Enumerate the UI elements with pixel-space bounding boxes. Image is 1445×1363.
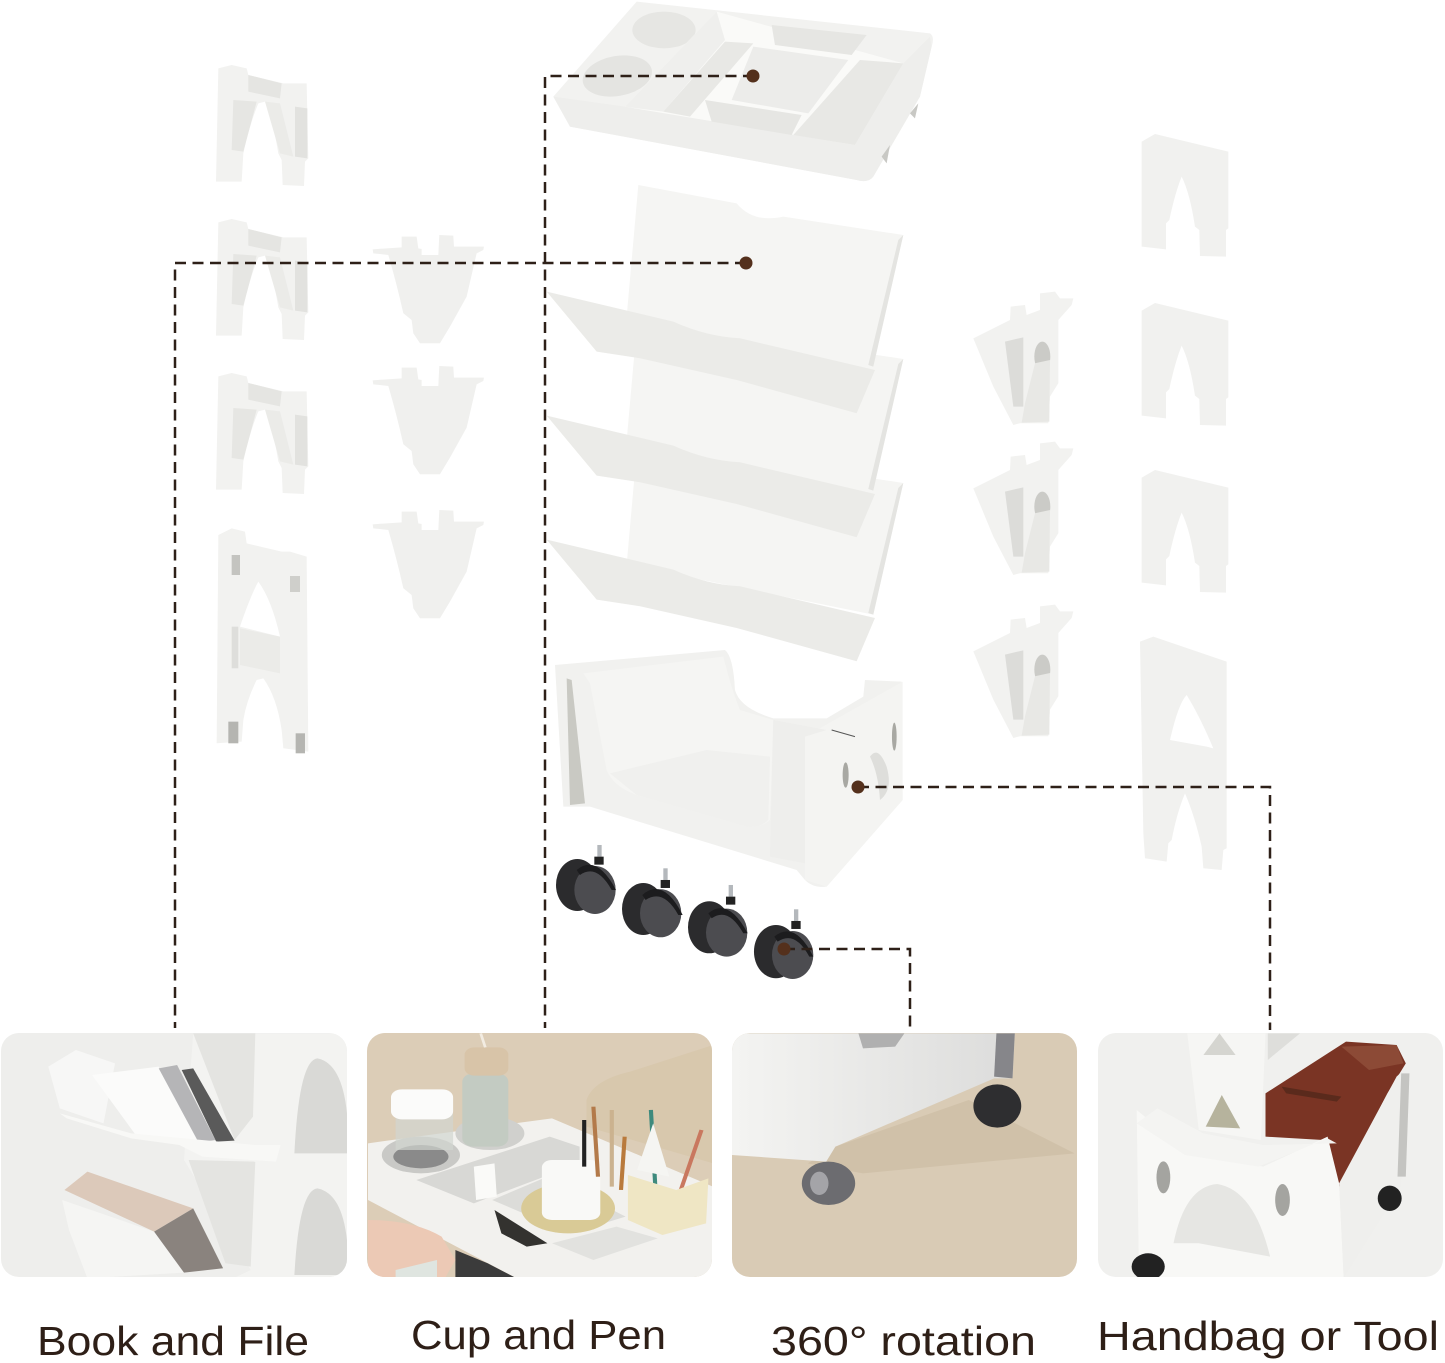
right triangular brackets [973,292,1073,738]
connector A3 [216,373,308,494]
shelf panels [547,185,903,661]
bracket L1 [373,235,484,343]
panel 2 (middle) [547,309,903,537]
connector A4 long [217,528,308,753]
bracket R2 [973,442,1073,575]
bracket R3 [973,605,1073,738]
connector B1 [1142,134,1228,257]
leader dots [740,70,864,956]
bracket R1 [973,292,1073,425]
left connector column [216,65,308,753]
caster 2 [622,868,683,937]
connector B4 long [1140,637,1227,870]
photo: handbag or tool [1098,1030,1445,1280]
panel 3 (lowest) [547,433,903,661]
photo: cup and pen [363,1030,718,1280]
connector B3 [1142,470,1228,593]
photo: 360 rotation caster [725,1030,1084,1280]
caption: Cup and Pen: Cup and Pen [411,1312,666,1358]
top tray [553,2,933,181]
caster 4 [754,909,813,979]
bracket L3 [373,510,484,618]
connector B2 [1142,303,1228,426]
caster 3 [688,885,748,957]
caster 1 [556,845,616,914]
left triangular brackets [373,235,484,618]
caption: Book and File: Book and File [37,1318,309,1363]
right connector column [1140,134,1228,870]
connector A1 [216,65,308,186]
casters [556,845,813,979]
dashed leader lines [175,76,1270,1030]
connector A2 [216,219,308,340]
caption: Handbag or Tool: Handbag or Tool [1097,1313,1439,1359]
bracket L2 [373,366,484,474]
photo: book and file [0,1030,350,1280]
bottom bin [555,650,903,887]
panel 1 (top) [547,185,903,413]
caption: 360° rotation: 360° rotation [771,1318,1036,1363]
